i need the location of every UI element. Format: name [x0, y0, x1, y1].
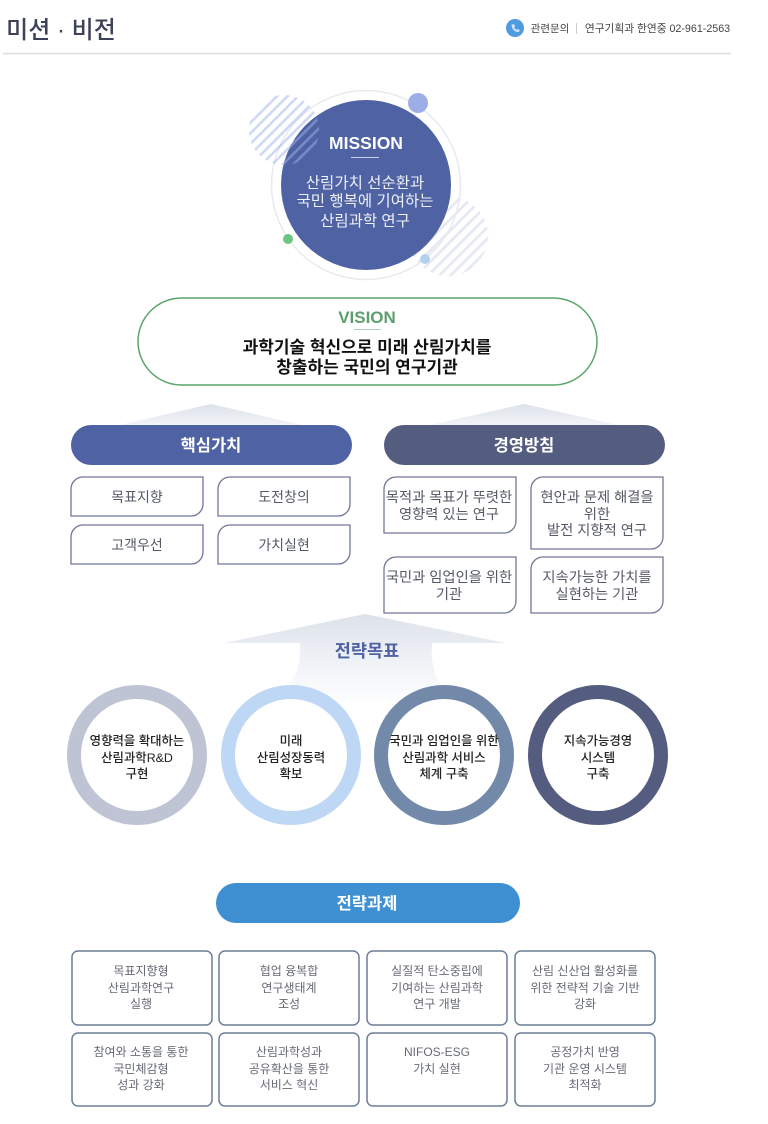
- goal 2: 산림성장동력: [257, 751, 325, 765]
- task 1: 실행: [130, 996, 152, 1011]
- goal 1: 구현: [126, 767, 148, 781]
- policy: 현안과 문제: [531, 477, 663, 549]
- page title: 미션 · 비전: [6, 17, 116, 44]
- policy: 지속가능한 가치: 실현하는 기관: [556, 586, 638, 603]
- strategic tasks grid: [72, 951, 655, 1106]
- mission statement: [297, 174, 433, 230]
- task 1: 목표지향형: [113, 964, 169, 978]
- goal 3: [381, 692, 507, 818]
- policy: 현안과 문제: 위한: [584, 506, 610, 523]
- task 2: 연구생태계: [261, 981, 317, 995]
- task 5: 참여와 소통을 통한: [94, 1045, 188, 1059]
- task 8: [515, 1033, 655, 1106]
- core value: 목표지향: 목표지향: [111, 489, 163, 505]
- core value: 도전창의: [218, 477, 350, 516]
- goal 2: 확보: [280, 767, 302, 781]
- arrow: strategic goals: [224, 614, 506, 706]
- task 2: 조성: [278, 997, 300, 1011]
- mission graphic: [249, 90, 488, 280]
- vision heading: VISION: [338, 308, 396, 327]
- task 6: 서비스 혁신: [260, 1078, 318, 1092]
- policy: 국민과 임업인: 기관: [436, 586, 462, 603]
- arrow: management policy: [430, 404, 618, 425]
- decorative hatched circle left: [249, 95, 319, 165]
- panel: management policy: [384, 425, 665, 613]
- vision statement: [243, 338, 491, 377]
- policy: 현안과 문제: 현안과 문제 해결을: [540, 489, 654, 506]
- dot: light blue: [420, 254, 430, 264]
- task 1: 산림과학연구: [108, 981, 174, 995]
- task 8: 공정가치 반영: [550, 1045, 620, 1059]
- task 4: 강화: [574, 997, 596, 1011]
- mission heading: MISSION: [329, 133, 403, 153]
- goal 1: 산림과학R&D: [101, 750, 173, 765]
- mission statement: 산림과학 연구: [320, 212, 410, 230]
- policy: 현안과 문제: 발전 지향적 연구: [547, 522, 647, 539]
- task 3: 연구 개발: [413, 997, 461, 1011]
- task 3: 실질적 탄소중립에: [391, 964, 483, 978]
- task 8: 기관 운영 시스템: [543, 1062, 627, 1076]
- policy: 목적과 목표: [384, 477, 516, 533]
- task 5: [72, 1033, 212, 1106]
- heading: management policy: [384, 425, 665, 465]
- task 3: [367, 951, 507, 1025]
- task 7: 가치 실현: [413, 1062, 461, 1076]
- heading: strategic tasks: 전략과제: [337, 894, 397, 913]
- task 2: [219, 951, 359, 1025]
- icon: phone: [506, 19, 524, 37]
- core value: 고객우선: [71, 525, 203, 564]
- heading: strategic goals: 전략목표: [335, 641, 399, 661]
- task 4: [515, 951, 655, 1025]
- goal 3: 국민과 임업인을 위한: [389, 734, 499, 748]
- core value: 도전창의: 도전창의: [258, 489, 310, 505]
- goal 1: 영향력을 확대하는: [90, 734, 184, 748]
- goal 4: 구축: [587, 767, 609, 781]
- task 5: 국민체감형: [113, 1062, 169, 1076]
- task 1: [72, 951, 212, 1025]
- heading: management policy: 경영방침: [494, 436, 554, 455]
- header: [3, 17, 731, 54]
- goal 4: 시스템: [581, 751, 615, 765]
- vision statement: 과학기술 혁신으로 미래 산림가치를: [243, 338, 491, 357]
- task 7: NIFOS-ESG: [404, 1045, 470, 1059]
- panel: core values: [71, 425, 352, 564]
- core value: 고객우선: 고객우선: [111, 537, 163, 553]
- task 6: 공유확산을 통한: [249, 1062, 329, 1076]
- core value: 목표지향: [71, 477, 203, 516]
- mission circle: [281, 100, 451, 270]
- vision panel: [138, 298, 597, 385]
- heading: strategic tasks: [216, 883, 520, 923]
- policy: 목적과 목표: 목적과 목표가 뚜렷한: [386, 489, 512, 506]
- core value: 가치실현: 가치실현: [258, 537, 310, 553]
- task 7: [367, 1033, 507, 1106]
- goal 4: [535, 692, 661, 818]
- contact info: 연구기획과 한연중 02-961-2563: [585, 23, 730, 35]
- goal 1: [74, 692, 200, 818]
- task 3: 기여하는 산림과학: [391, 981, 483, 995]
- dot: green: [283, 234, 293, 244]
- task 6: 산림과학성과: [256, 1045, 322, 1059]
- decorative hatched circle right: [408, 196, 488, 276]
- policy: 지속가능한 가치: 지속가능한 가치를: [542, 569, 652, 586]
- core value: 가치실현: [218, 525, 350, 564]
- heading: core values: 핵심가치: [181, 436, 241, 455]
- outer ring: [272, 90, 460, 280]
- policy: 목적과 목표: 영향력 있는 연구: [399, 506, 499, 523]
- arrow: core values: [120, 404, 302, 425]
- heading: core values: [71, 425, 352, 465]
- task 2: 협업 융복합: [260, 964, 318, 978]
- mission statement: 산림가치 선순환과: [306, 174, 424, 192]
- dot: periwinkle: [408, 93, 428, 113]
- task 8: 최적화: [568, 1078, 602, 1092]
- task 4: 위한 전략적 기술 기반: [530, 981, 640, 995]
- contact info: 관련문의: [531, 23, 569, 35]
- task 6: [219, 1033, 359, 1106]
- goal 3: 산림과학 서비스: [402, 750, 486, 765]
- goal 2: 미래: [280, 734, 302, 748]
- vision statement: 창출하는 국민의 연구기관: [276, 358, 458, 377]
- goal 4: 지속가능경영: [564, 734, 632, 748]
- policy: 국민과 임업인: 국민과 임업인을 위한: [386, 569, 512, 586]
- strategic goals circles: [74, 692, 661, 818]
- goal 3: 체계 구축: [419, 767, 469, 781]
- policy: 지속가능한 가치: [531, 557, 663, 613]
- task 4: 산림 신산업 활성화를: [532, 964, 638, 978]
- policy: 국민과 임업인: [384, 557, 516, 613]
- task 5: 성과 강화: [117, 1078, 165, 1092]
- goal 2: [228, 692, 354, 818]
- mission statement: 국민 행복에 기여하는: [297, 192, 433, 210]
